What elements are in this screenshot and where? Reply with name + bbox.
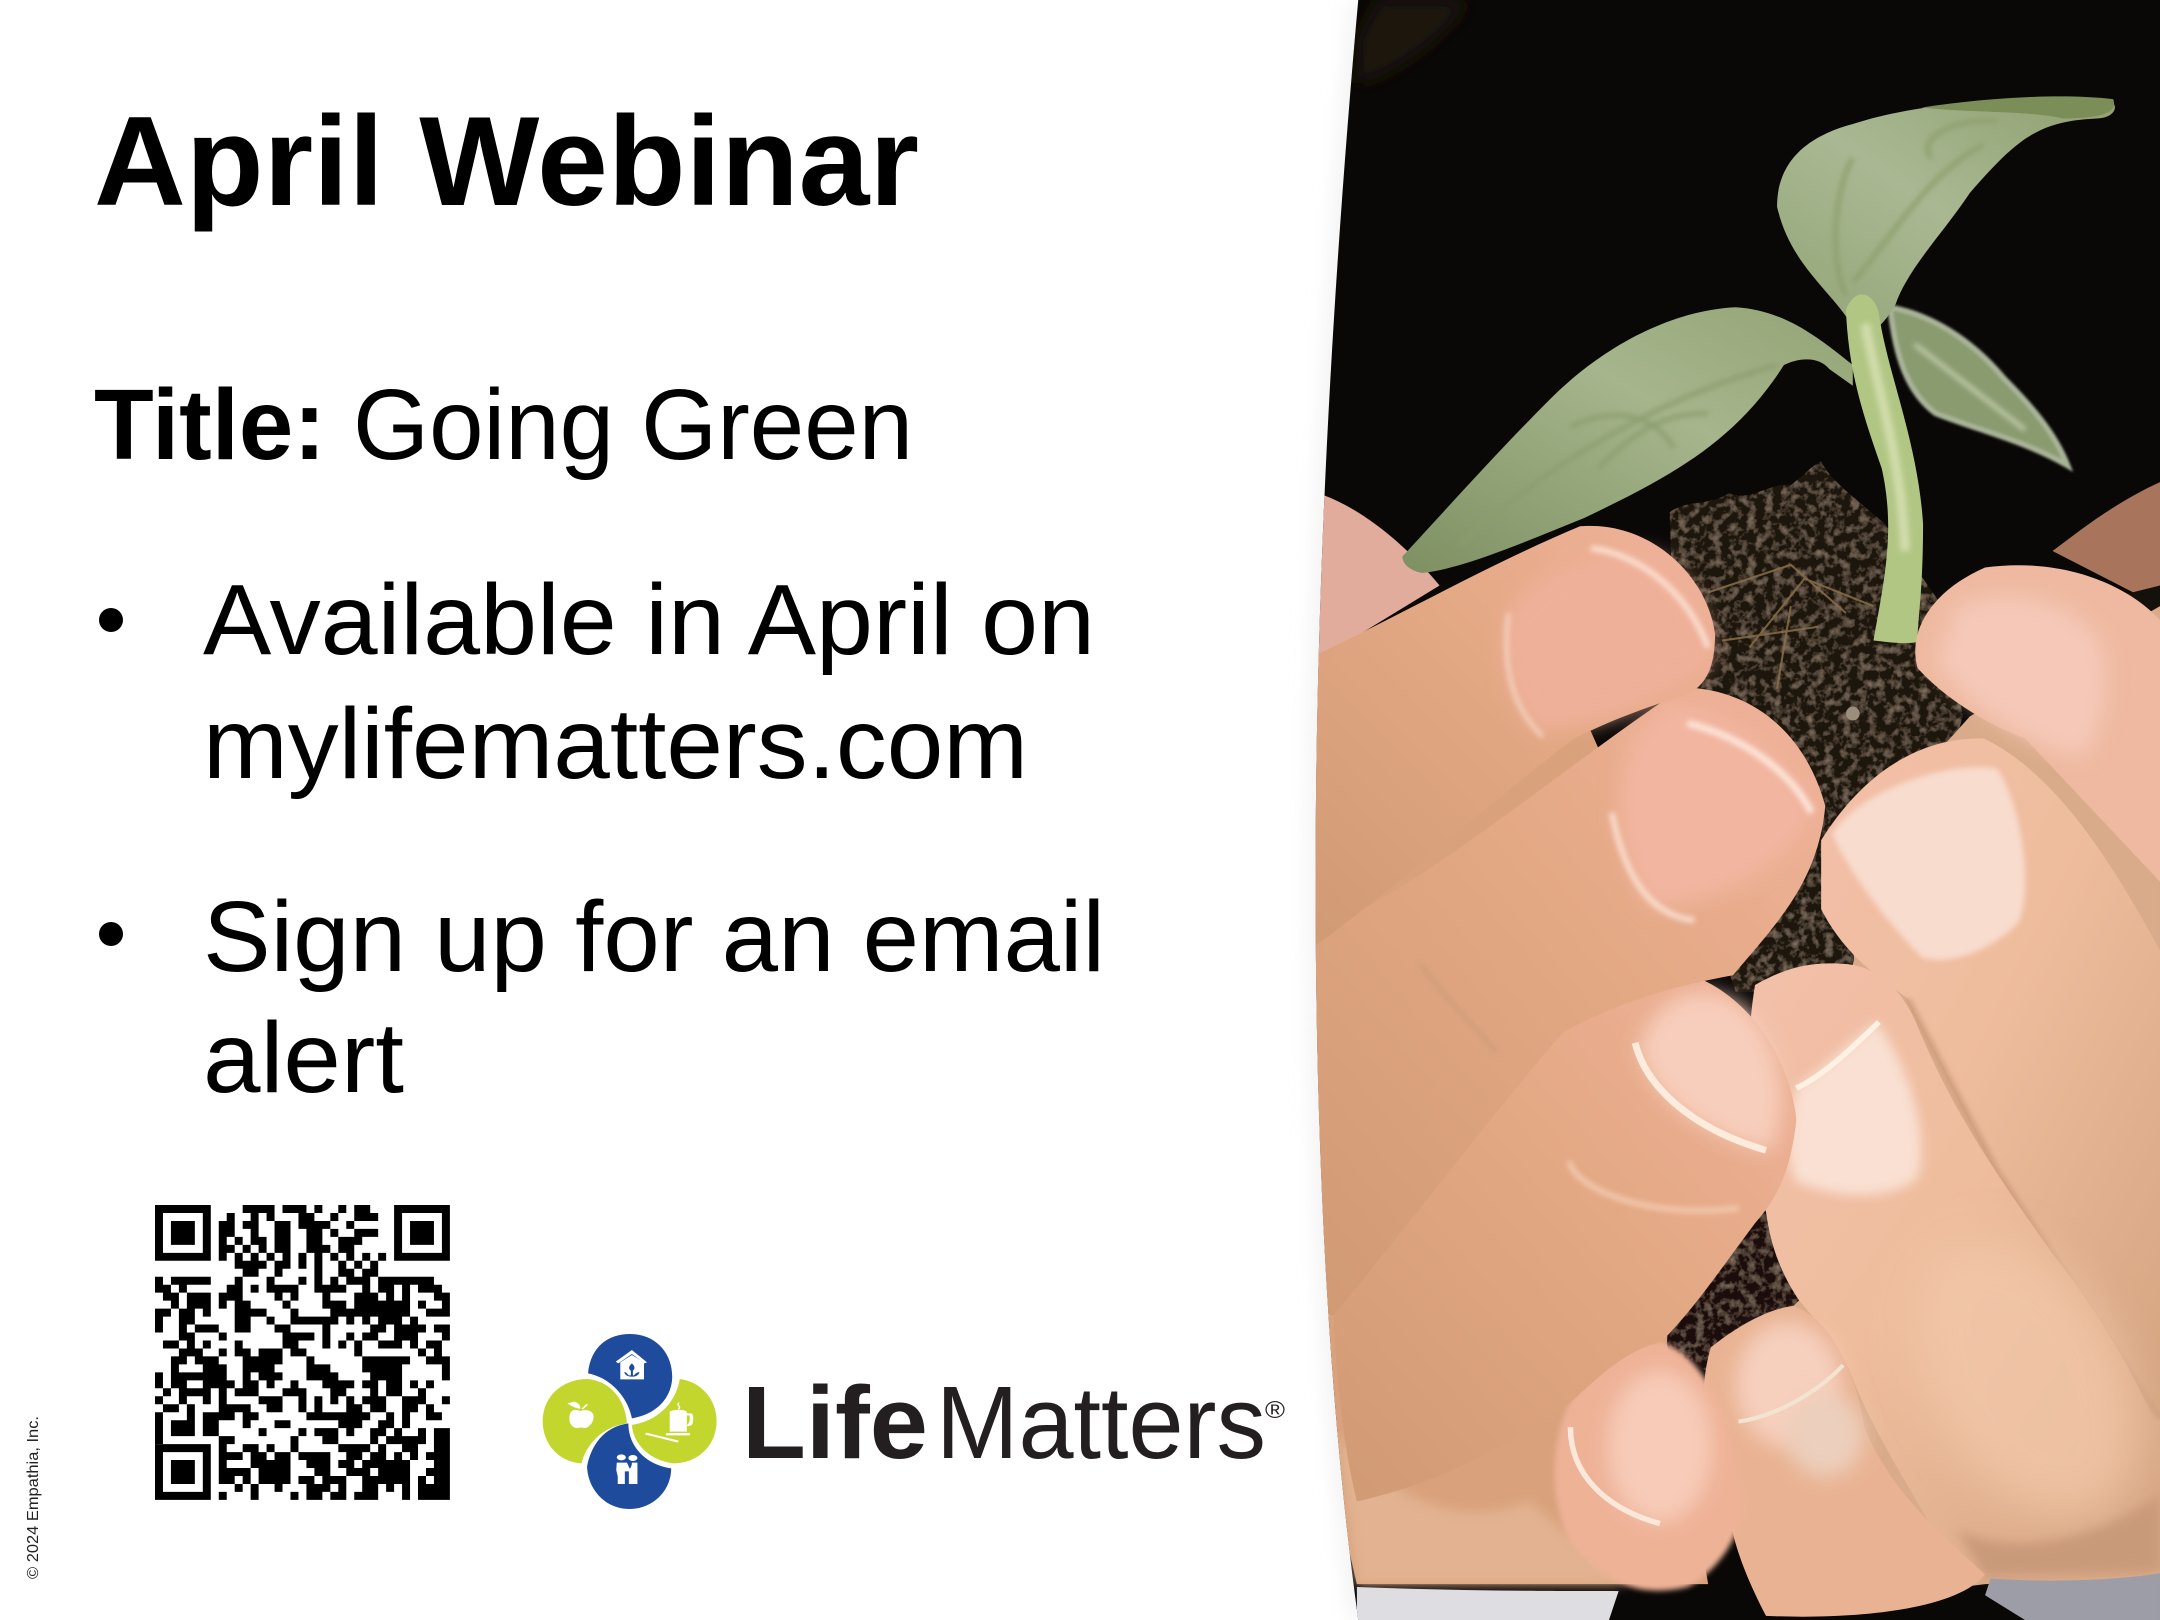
icon: coffee mug	[645, 1403, 693, 1443]
webinar topic line: Title: Going Green	[94, 369, 913, 481]
small furry leaf	[1890, 307, 2068, 466]
QR code	[155, 1205, 450, 1500]
lower right long finger	[1749, 963, 2160, 1578]
soil clump	[1639, 461, 1963, 1371]
second left finger	[1309, 687, 1825, 1316]
back of hands behind seedling	[1309, 482, 2160, 661]
seedling stem	[1846, 294, 1923, 643]
bullet: availability: Available in April on	[203, 564, 1095, 676]
bullet: availability: mylifematters.com	[203, 688, 1028, 800]
photo: hands holding a seedling	[1295, 0, 2160, 1620]
long left leaf	[1402, 307, 1853, 573]
large upper leaf	[1777, 96, 2115, 333]
lower left fingertip	[1555, 1342, 1743, 1591]
copyright note: © 2024 Empathia, Inc.	[25, 1416, 42, 1579]
logo mark: four-petal pinwheel	[543, 1334, 717, 1509]
base skin of the left hand	[1309, 661, 1708, 1584]
logo: LifeMatters: Matters	[936, 1365, 1266, 1480]
knuckle of the lower left hand	[1336, 1433, 1626, 1584]
bullet: availability	[99, 564, 1095, 800]
fingers	[1309, 526, 2160, 1617]
wordmark: Life	[742, 1365, 928, 1480]
third left finger	[1333, 973, 1796, 1502]
right large finger	[1821, 738, 2160, 1246]
bottom center finger	[1703, 1306, 1985, 1617]
bullet: email alert: Sign up for an email	[203, 881, 1105, 993]
icon: family figures	[616, 1454, 637, 1484]
icon: apple	[567, 1402, 594, 1428]
bullet: email alert: alert	[203, 1002, 404, 1114]
bullet: email alert	[99, 881, 1105, 1114]
dark background	[1295, 0, 2160, 1620]
sleeves at bottom	[1357, 1573, 2160, 1620]
top right finger	[1915, 565, 2160, 882]
top left thumb	[1309, 526, 1715, 951]
icon: house with plant	[616, 1350, 647, 1379]
base skin of the right hand	[1794, 606, 2160, 1586]
logo: LifeMatters: ®	[1265, 1397, 1285, 1424]
logo: LifeMatters	[543, 1334, 1285, 1509]
bullet list	[99, 564, 1105, 1114]
title: April Webinar	[94, 90, 919, 232]
